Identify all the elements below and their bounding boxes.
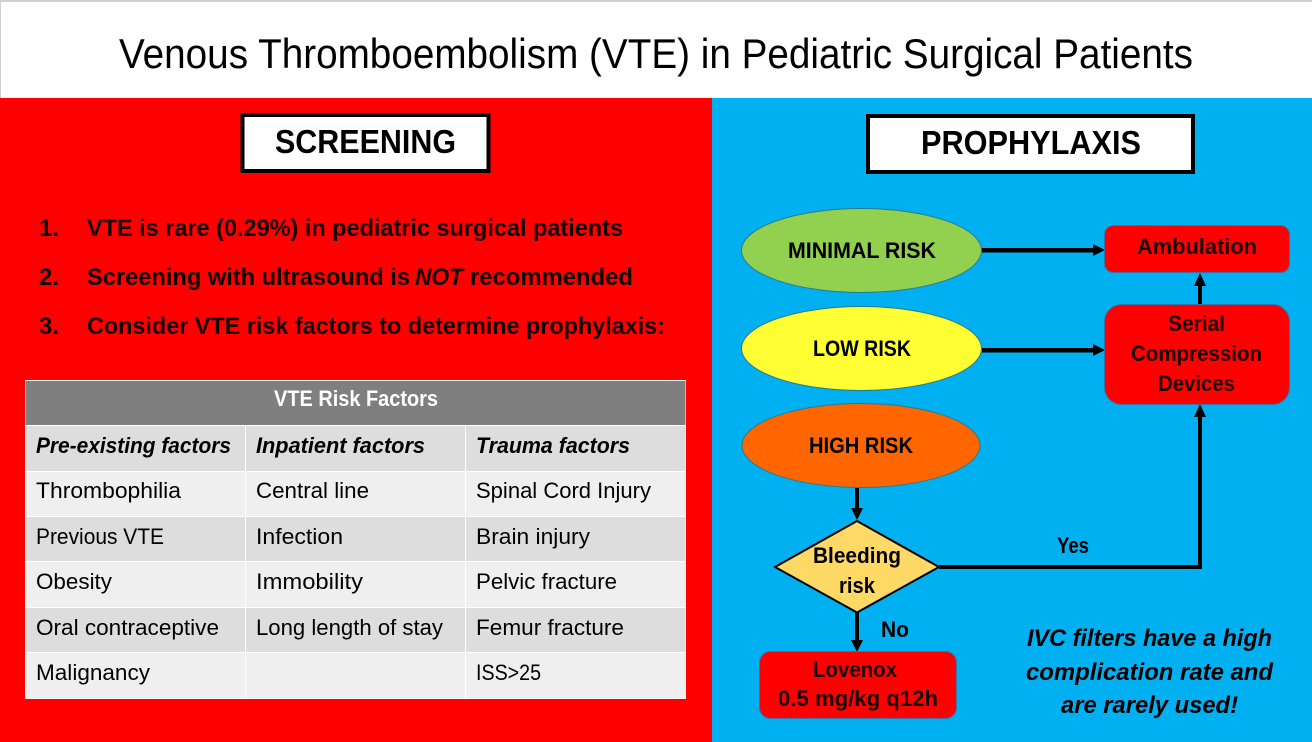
heading: screening [242, 115, 488, 171]
numbered list: 2. [39, 264, 59, 291]
arrow: high risk to bleeding risk [851, 488, 863, 520]
table header [26, 381, 686, 425]
node: minimal risk [742, 208, 982, 292]
arrow: low risk to compression devices [982, 344, 1105, 356]
node: serial compression devices: Serial [1168, 311, 1225, 336]
row 2 [26, 517, 686, 561]
node: lovenox: Lovenox [813, 657, 897, 682]
numbered list: Screening with ultrasound is [87, 264, 410, 291]
row 1: Central line [256, 478, 369, 503]
callout: IVC filters [1026, 625, 1274, 719]
arrow: bleeding risk no to lovenox [851, 612, 863, 652]
row 4: Femur fracture [476, 615, 624, 640]
decision: bleeding risk: risk [839, 573, 875, 598]
node: minimal risk: MINIMAL RISK [788, 238, 937, 263]
numbered list: NOT [415, 264, 465, 291]
numbered list: VTE is rare (0.29%) in pediatric surgical patients [87, 215, 623, 242]
node: ambulation: Ambulation [1137, 234, 1257, 259]
row 5: Malignancy [36, 660, 151, 685]
row 3: Obesity [36, 569, 113, 594]
row 1: Thrombophilia [36, 478, 181, 503]
arrow: minimal risk to ambulation [982, 244, 1105, 256]
node: ambulation [1104, 226, 1290, 272]
panel: prophylaxis [712, 98, 1312, 742]
row 2: Infection [256, 524, 343, 549]
column headers row: Inpatient factors [256, 433, 425, 458]
callout: IVC filters: complication rate and [1026, 659, 1274, 686]
node: low risk [742, 306, 982, 390]
heading: prophylaxis: PROPHYLAXIS [921, 124, 1141, 161]
node: lovenox: 0.5 mg/kg q12h [778, 686, 938, 711]
numbered list: Consider VTE risk factors to determine prophylaxis: [87, 313, 665, 340]
label: yes: Yes [1057, 533, 1089, 558]
title banner [0, 0, 1312, 98]
row 3: Immobility [256, 569, 364, 594]
panel: screening [0, 98, 712, 742]
numbered list: 3. [39, 313, 59, 340]
heading: screening: SCREENING [275, 123, 456, 160]
table header: VTE Risk Factors [274, 386, 438, 411]
row 1 [26, 472, 686, 516]
row 5 [26, 653, 686, 698]
label: no: No [881, 617, 909, 642]
node: low risk: LOW RISK [813, 336, 912, 361]
row 1: Spinal Cord Injury [476, 478, 652, 503]
row 4: Long length of stay [256, 615, 444, 640]
row 2: Previous VTE [36, 524, 164, 549]
heading: prophylaxis [868, 116, 1193, 172]
callout: IVC filters: are rarely used! [1061, 692, 1238, 719]
column headers row: Trauma factors [476, 433, 630, 458]
node: high risk: HIGH RISK [809, 433, 914, 458]
callout: IVC filters: IVC filters have a high [1027, 625, 1272, 652]
numbered list [39, 215, 665, 340]
node: serial compression devices [1104, 304, 1290, 404]
node: serial compression devices: Compression [1131, 341, 1262, 366]
row 3 [26, 562, 686, 607]
column headers row: Pre-existing factors [36, 433, 231, 458]
node: serial compression devices: Devices [1158, 371, 1235, 396]
numbered list: 1. [39, 215, 59, 242]
arrow: bleeding risk yes to compression devices [939, 404, 1206, 567]
decision: bleeding risk: Bleeding [813, 543, 901, 568]
arrow: compression devices to ambulation [1194, 273, 1206, 304]
row 4: Oral contraceptive [36, 615, 219, 640]
row 4 [26, 608, 686, 652]
node: lovenox [760, 652, 956, 718]
node: high risk [742, 404, 980, 488]
row 5: ISS>25 [476, 660, 541, 685]
row 2: Brain injury [476, 524, 591, 549]
column headers row [26, 426, 686, 471]
numbered list: recommended [470, 264, 633, 291]
decision: bleeding risk [775, 521, 939, 612]
title: Venous Thromboembolism (VTE) in Pediatric Surgical Patients [119, 30, 1193, 77]
table: VTE risk factors [25, 380, 686, 699]
row 3: Pelvic fracture [476, 569, 617, 594]
